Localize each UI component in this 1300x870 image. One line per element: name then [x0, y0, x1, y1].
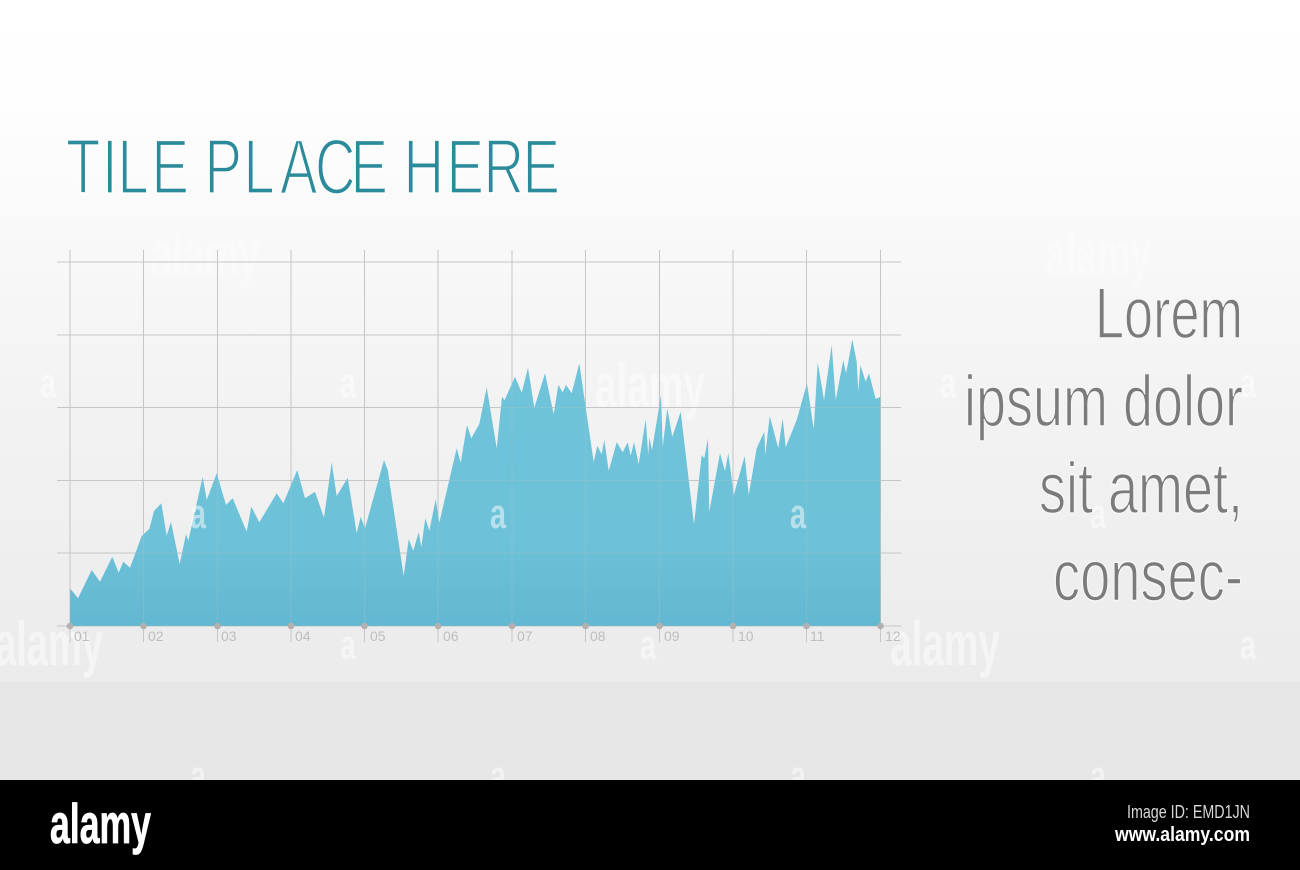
chart watermark letters	[190, 490, 806, 537]
watermarks: alamy	[595, 352, 705, 421]
watermarks: a	[340, 359, 356, 406]
website: www.alamy.com	[1114, 824, 1250, 846]
watermarks: a	[1240, 621, 1256, 668]
axis labels: 02	[148, 628, 164, 644]
axis labels: 05	[370, 628, 386, 644]
side text: Lorem	[1095, 274, 1243, 354]
axis markers	[67, 623, 884, 629]
axis labels: 04	[295, 628, 311, 644]
chart watermark letters: a	[490, 490, 506, 537]
area chart	[57, 250, 901, 644]
axis labels	[74, 628, 901, 644]
watermarks: a	[1240, 359, 1256, 406]
watermarks: alamy	[0, 610, 103, 679]
chart watermark letters: a	[190, 490, 206, 537]
image id: Image ID: EMD1JN	[1127, 802, 1250, 822]
chart watermark letters: a	[790, 490, 806, 537]
watermarks: a	[790, 752, 806, 799]
watermarks: a	[640, 621, 656, 668]
axis labels: 08	[590, 628, 606, 644]
watermarks: a	[340, 621, 356, 668]
side text: consec-	[1053, 536, 1243, 616]
axis labels: 06	[443, 628, 459, 644]
grid lines showing through area	[57, 250, 901, 642]
title: TILE PLACE HERE	[66, 123, 560, 211]
watermarks: a	[1090, 490, 1106, 537]
watermarks: a	[1090, 752, 1106, 799]
footer logo: alamy	[50, 792, 151, 855]
watermarks	[0, 220, 1256, 799]
axis labels: 01	[74, 628, 90, 644]
axis labels: 10	[738, 628, 754, 644]
watermarks: a	[190, 752, 206, 799]
chart grid lines	[57, 250, 901, 642]
watermarks: alamy	[1045, 220, 1151, 289]
axis labels: 07	[517, 628, 533, 644]
data area	[70, 339, 880, 626]
watermarks: alamy	[150, 220, 260, 289]
watermarks: a	[940, 359, 956, 406]
axis labels: 12	[885, 628, 901, 644]
axis labels: 09	[664, 628, 680, 644]
axis labels: 03	[221, 628, 237, 644]
side text	[964, 274, 1243, 616]
watermarks: a	[490, 752, 506, 799]
watermarks: a	[40, 359, 56, 406]
watermarks: alamy	[890, 610, 1000, 679]
axis labels: 11	[810, 628, 825, 644]
footer bar	[0, 780, 1300, 870]
